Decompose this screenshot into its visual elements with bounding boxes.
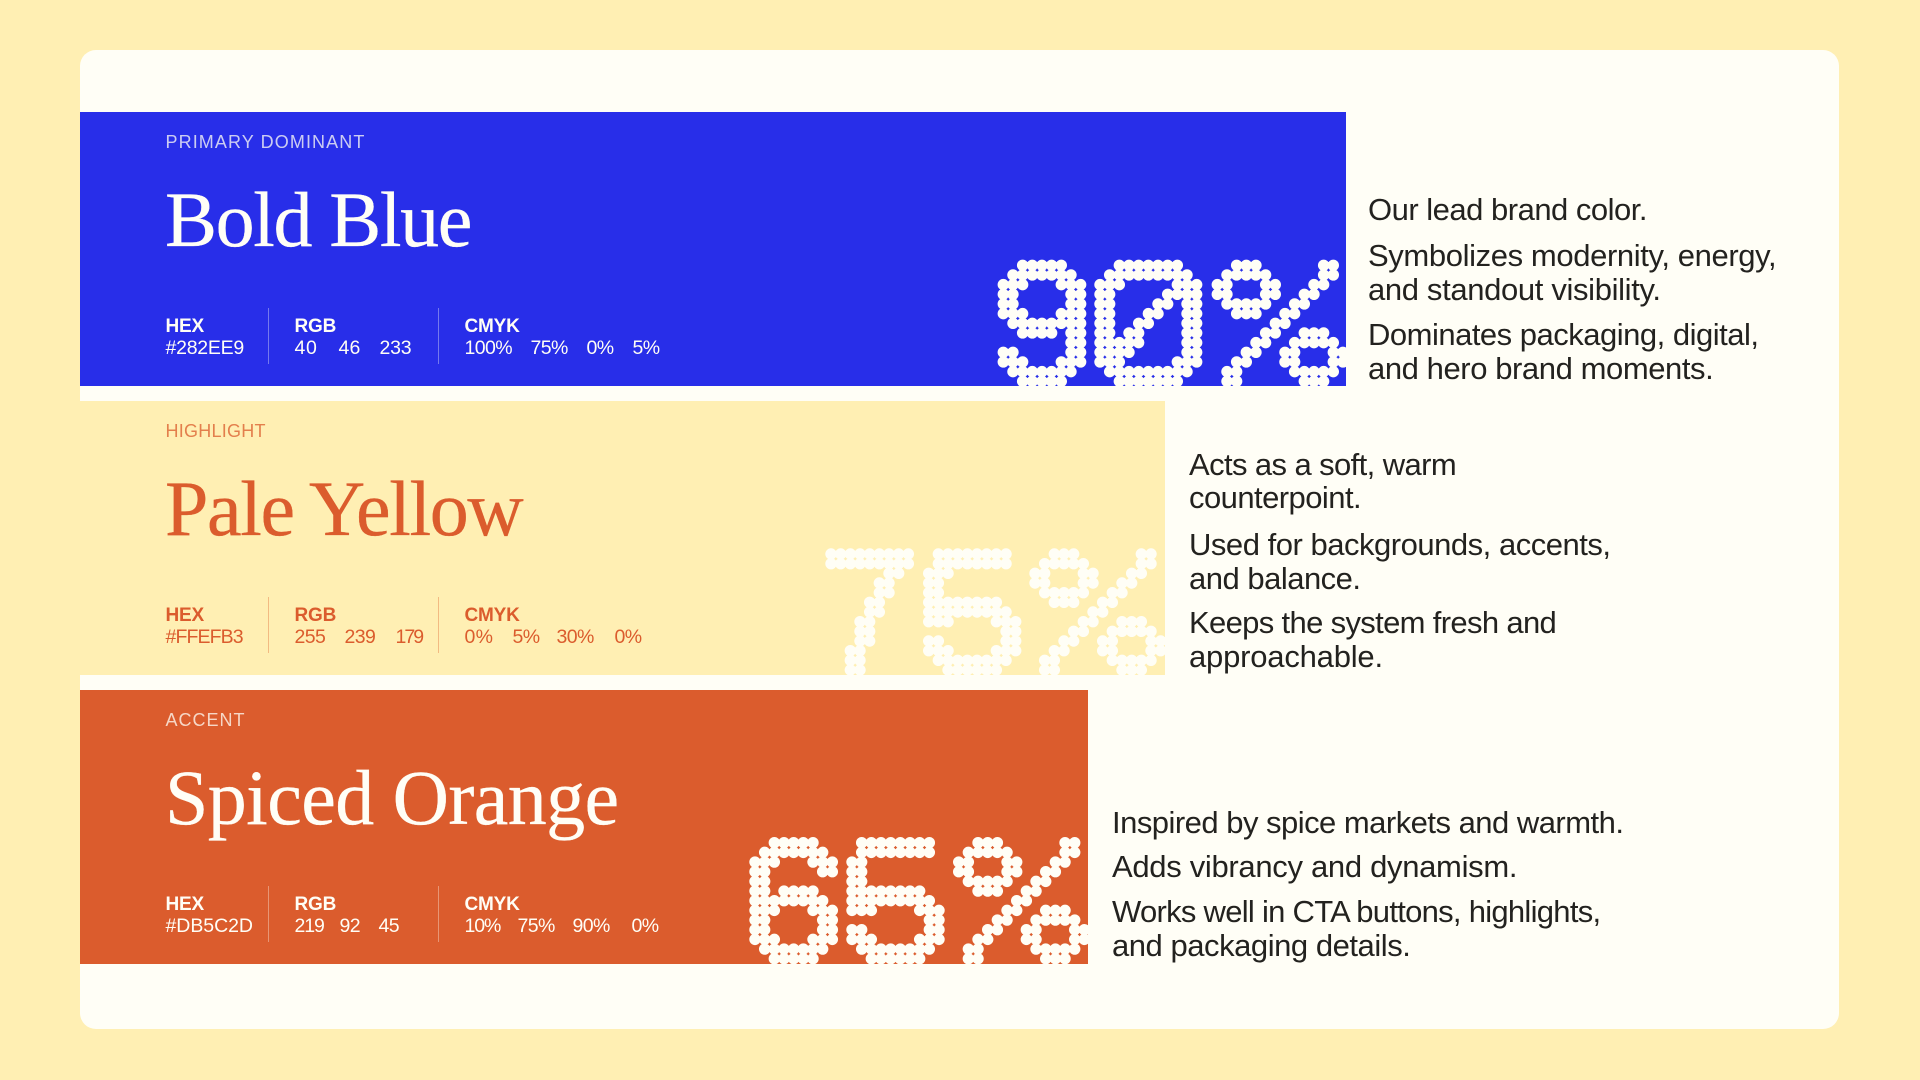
panel: Pale Yellow row <box>80 401 1611 675</box>
RGB values: 45 <box>378 915 399 937</box>
description: Pale Yellow: Used for backgrounds, accents, <box>1189 527 1611 562</box>
heading: Pale Yellow: Pale Yellow <box>165 465 522 552</box>
HEX value: HEX <box>166 316 204 337</box>
heading: Spiced Orange: Spiced Orange <box>165 754 619 841</box>
panel: Bold Blue row <box>80 112 1776 386</box>
label: accent: ACCENT <box>166 710 246 730</box>
description: Bold Blue: and standout visibility. <box>1368 272 1661 307</box>
divider <box>268 886 269 942</box>
HEX value <box>166 316 244 359</box>
CMYK values: 0% <box>464 626 493 648</box>
CMYK values: 30% <box>556 626 594 648</box>
RGB values <box>294 605 424 648</box>
HEX value: #DB5C2D <box>166 915 253 937</box>
description: Pale Yellow <box>1189 447 1611 674</box>
description: Pale Yellow: Keeps the system fresh and <box>1189 605 1556 640</box>
description: Bold Blue: Symbolizes modernity, energy, <box>1368 238 1776 273</box>
label: highlight: HIGHLIGHT <box>166 421 266 441</box>
RGB values <box>294 316 411 359</box>
description: Bold Blue: and hero brand moments. <box>1368 351 1713 386</box>
HEX value: HEX <box>166 605 204 626</box>
colour band: Spiced Orange <box>80 690 1088 964</box>
CMYK values: 100% <box>464 337 512 359</box>
CMYK values: CMYK <box>464 316 520 337</box>
RGB values: 233 <box>380 337 411 359</box>
dot-matrix figure: 75% <box>825 548 1165 675</box>
divider <box>268 597 269 653</box>
CMYK values: 0% <box>632 915 658 937</box>
RGB values: 179 <box>396 626 422 648</box>
RGB values: 46 <box>338 337 361 359</box>
RGB values: 92 <box>340 915 360 937</box>
RGB values: 219 <box>294 915 324 937</box>
RGB values: RGB <box>294 316 336 337</box>
CMYK values: 5% <box>632 337 659 359</box>
CMYK values: 0% <box>614 626 641 648</box>
CMYK values <box>464 894 658 937</box>
description: Spiced Orange: Works well in CTA buttons, highlights, <box>1112 894 1600 929</box>
divider <box>268 308 269 364</box>
colour band: Pale Yellow <box>80 401 1165 675</box>
dot-matrix figure: 65% <box>749 837 1088 964</box>
HEX value: HEX <box>166 894 204 915</box>
description: Pale Yellow: Acts as a soft, warm <box>1189 447 1456 482</box>
colour band: Bold Blue <box>80 112 1346 386</box>
HEX value: #282EE9 <box>166 337 244 359</box>
description: Bold Blue <box>1368 192 1776 386</box>
CMYK values: 75% <box>518 915 555 937</box>
CMYK values: 75% <box>530 337 568 359</box>
description: Pale Yellow: approachable. <box>1189 639 1383 674</box>
CMYK values: CMYK <box>464 605 520 626</box>
RGB values: 255 <box>294 626 325 648</box>
description: Pale Yellow: counterpoint. <box>1189 480 1361 515</box>
panel: Spiced Orange row <box>80 690 1623 964</box>
CMYK values: 10% <box>464 915 500 937</box>
CMYK values: 90% <box>572 915 610 937</box>
HEX value <box>166 605 243 648</box>
CMYK values <box>464 605 642 648</box>
RGB values: 40 <box>294 337 317 359</box>
description: Bold Blue: Dominates packaging, digital, <box>1368 317 1758 352</box>
heading: Bold Blue: Bold Blue <box>165 176 471 263</box>
description: Pale Yellow: and balance. <box>1189 561 1361 596</box>
RGB values: 239 <box>344 626 375 648</box>
HEX value <box>166 894 253 937</box>
description: Spiced Orange: Adds vibrancy and dynamism. <box>1112 849 1517 884</box>
CMYK values <box>464 316 660 359</box>
divider <box>438 597 439 653</box>
divider <box>438 308 439 364</box>
description: Spiced Orange: Inspired by spice markets and warmth. <box>1112 805 1623 840</box>
CMYK values: 5% <box>512 626 539 648</box>
CMYK values: 0% <box>586 337 613 359</box>
dot-matrix figure: 90% <box>998 260 1346 386</box>
label: primary dominant: PRIMARY DOMINANT <box>166 132 365 152</box>
CMYK values: CMYK <box>464 894 520 915</box>
RGB values: RGB <box>294 605 336 626</box>
description: Bold Blue: Our lead brand color. <box>1368 192 1647 227</box>
RGB values: RGB <box>294 894 336 915</box>
description: Spiced Orange <box>1112 805 1623 963</box>
RGB values <box>294 894 399 937</box>
HEX value: #FFEFB3 <box>166 626 243 648</box>
description: Spiced Orange: and packaging details. <box>1112 928 1410 963</box>
divider <box>438 886 439 942</box>
